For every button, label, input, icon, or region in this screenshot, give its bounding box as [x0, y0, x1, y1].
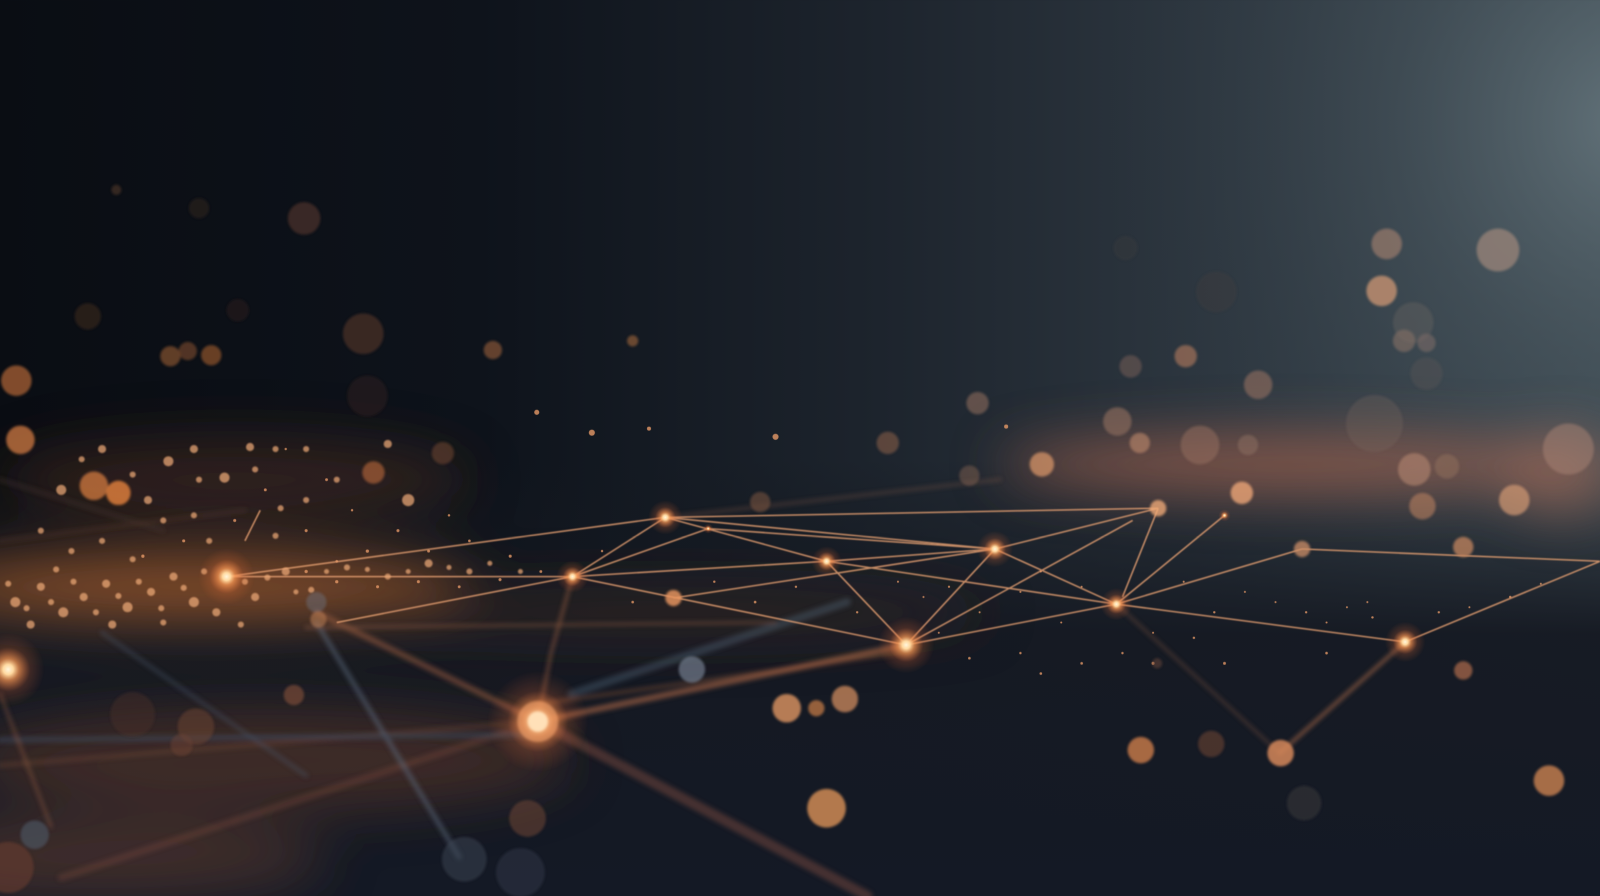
glowing network nodes [0, 500, 1426, 772]
network mesh lines [227, 508, 1600, 645]
left particle band [5, 440, 523, 629]
blurred foreground lines [0, 480, 1405, 896]
warm haze [0, 434, 1600, 896]
fine dust particles [141, 410, 1542, 675]
bokeh orbs [0, 185, 1594, 896]
